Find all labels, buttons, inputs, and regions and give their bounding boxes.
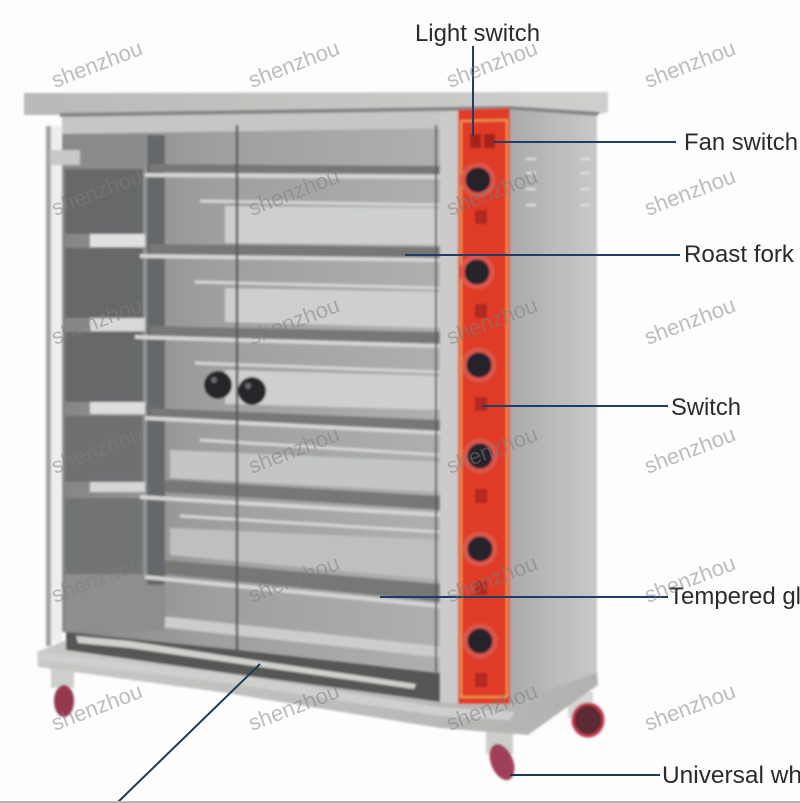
top frame band (62, 110, 458, 134)
watermarks: shenzhou (641, 292, 739, 350)
left chamber blocks (65, 136, 165, 631)
watermarks: shenzhou (48, 163, 146, 221)
watermarks: shenzhou (48, 35, 146, 93)
watermarks: shenzhou (641, 35, 739, 93)
base tray (37, 640, 598, 735)
drip rail (76, 636, 416, 689)
watermarks (48, 35, 739, 736)
watermarks: shenzhou (443, 163, 541, 221)
watermarks: shenzhou (641, 678, 739, 736)
watermarks: shenzhou (245, 35, 343, 93)
roast fork rails (135, 175, 440, 652)
watermarks: shenzhou (443, 35, 541, 93)
watermarks: shenzhou (48, 550, 146, 608)
top plate (24, 92, 608, 115)
labels: Universal wh (662, 762, 800, 789)
inner chamber (62, 124, 440, 673)
labels: Light switch (415, 20, 540, 47)
labels: Fan switch (684, 129, 798, 156)
watermarks: shenzhou (245, 421, 343, 479)
labels: Switch (671, 394, 741, 421)
central dark column (147, 135, 165, 585)
door hinge (50, 150, 80, 165)
rotisserie oven photo (24, 92, 608, 784)
watermarks: shenzhou (245, 163, 343, 221)
watermarks: shenzhou (443, 421, 541, 479)
side vents (526, 158, 590, 206)
watermarks: shenzhou (245, 292, 343, 350)
shadow bands (150, 164, 440, 602)
watermarks: shenzhou (443, 678, 541, 736)
watermarks: shenzhou (443, 292, 541, 350)
watermarks: shenzhou (641, 421, 739, 479)
labels (415, 20, 800, 789)
watermarks: shenzhou (48, 292, 146, 350)
casters (51, 664, 603, 784)
watermarks: shenzhou (245, 550, 343, 608)
watermarks: shenzhou (641, 163, 739, 221)
light bands (170, 206, 440, 580)
watermarks: shenzhou (641, 550, 739, 608)
labels: Tempered gl (669, 583, 800, 610)
knobs (462, 165, 495, 656)
door seams (236, 125, 238, 652)
watermarks: shenzhou (443, 550, 541, 608)
tray slot (66, 632, 440, 702)
light and fan switches (470, 134, 481, 148)
right door post (440, 110, 458, 704)
door handles (204, 371, 266, 405)
bottom edge (0, 801, 800, 803)
left door frame (46, 126, 62, 642)
side panel (507, 110, 597, 722)
watermarks: shenzhou (48, 678, 146, 736)
rocker switches (476, 211, 486, 686)
watermarks: shenzhou (245, 678, 343, 736)
leader lines (117, 46, 680, 803)
control panel (458, 108, 510, 704)
watermarks: shenzhou (48, 421, 146, 479)
labels: Roast fork (684, 241, 795, 268)
